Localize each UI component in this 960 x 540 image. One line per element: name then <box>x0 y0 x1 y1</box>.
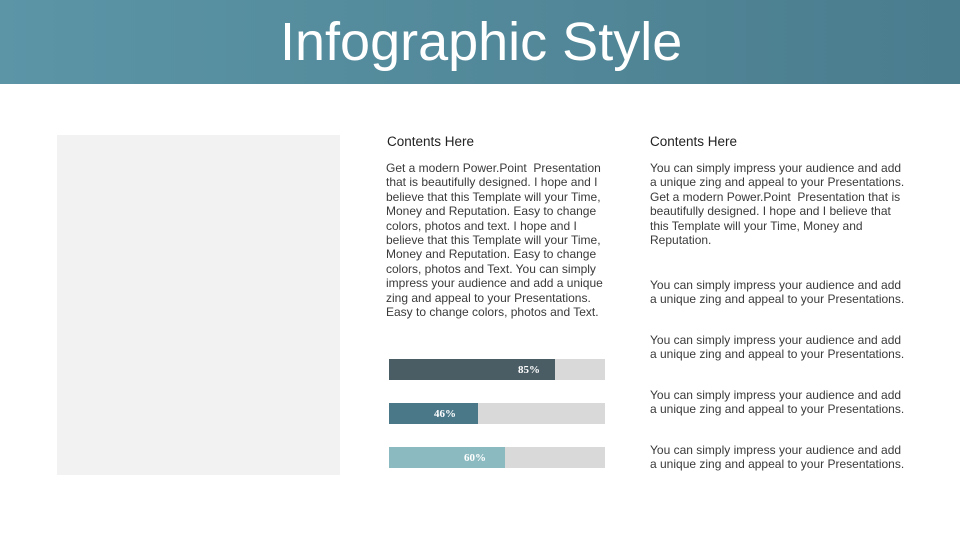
bar 85% <box>389 359 605 380</box>
bar 60%: 60% <box>464 452 486 464</box>
bar 46%: 46% <box>434 408 456 420</box>
text right 1: You can simply impress your audience and add a unique zing and appeal to your Presentations. Get a modern Power.Point Presentation that is beautifully designed. I hope and I believe that this Template will your Time, Money and Reputation. <box>650 161 904 247</box>
image placeholder <box>57 135 340 475</box>
text right 2: You can simply impress your audience and add a unique zing and appeal to your Presentations. <box>650 278 904 306</box>
text left: Get a modern Power.Point Presentation that is beautifully designed. I hope and I believe that this Template will your Time, Money and Reputation. Easy to change colors, photos and text. I hope and I believe that this Template will your Time, Money and Reputation. Easy to change colors, photos and Text. You can simply impress your audience and add a unique zing and appeal to your Presentations. Easy to change colors, photos and Text. <box>386 161 603 319</box>
heading right: Contents Here <box>650 134 737 149</box>
bar 46% <box>389 403 605 424</box>
bar 60% <box>389 447 605 468</box>
heading left: Contents Here <box>387 134 474 149</box>
title: Infographic Style <box>280 12 682 72</box>
text right 4: You can simply impress your audience and add a unique zing and appeal to your Presentations. <box>650 388 904 416</box>
header banner <box>0 0 960 84</box>
text right 3: You can simply impress your audience and add a unique zing and appeal to your Presentations. <box>650 333 904 361</box>
bar 85%: 85% <box>518 364 540 376</box>
text right 5: You can simply impress your audience and add a unique zing and appeal to your Presentations. <box>650 443 904 471</box>
